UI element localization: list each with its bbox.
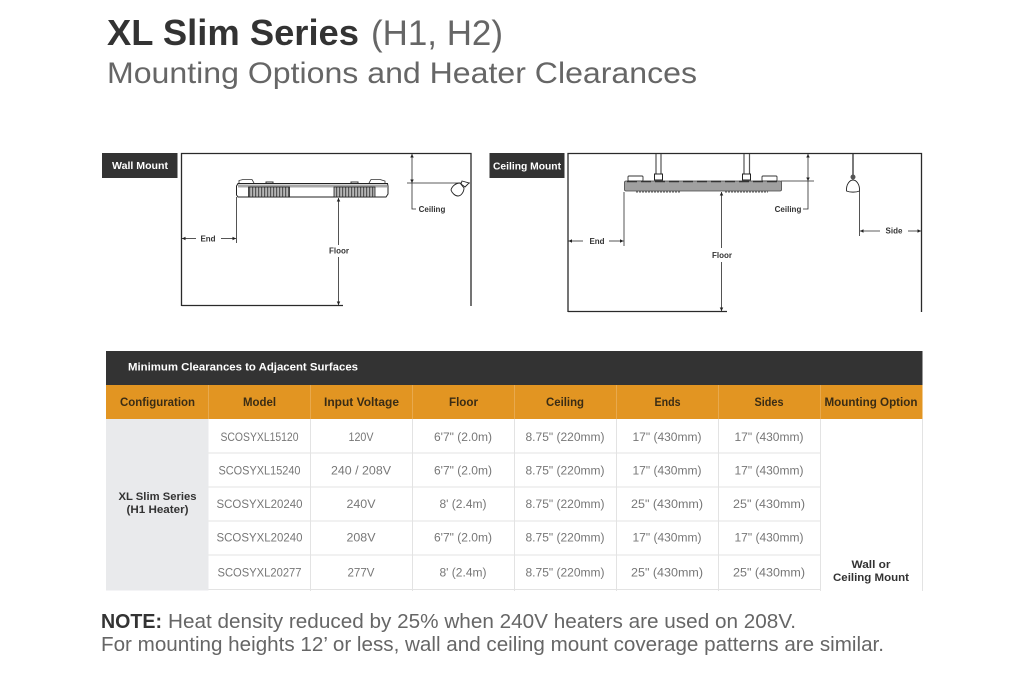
row: SCOSYXL15240: 17" (430mm): [734, 466, 804, 478]
table header row: Configuration: [120, 397, 195, 409]
mounting option cell: [833, 559, 909, 584]
dimension: end: End: [200, 234, 216, 244]
note: NOTE:: [101, 611, 162, 633]
diagram: wall mount: [182, 154, 471, 306]
table title bar: Minimum Clearances to Adjacent Surfaces: [128, 362, 358, 374]
dimension: ceiling: Ceiling: [775, 205, 801, 214]
table header row: Ceiling: [546, 397, 584, 409]
table header row: Ends: [654, 397, 680, 409]
row: SCOSYXL15240: 240 / 208V: [331, 466, 391, 478]
title: XL Slim Series: [107, 12, 359, 53]
icon: ceiling heater: [624, 154, 782, 192]
row: SCOSYXL20240 240V: [216, 499, 805, 511]
table header row: Input Voltage: [324, 397, 399, 409]
label: wall mount: [102, 153, 178, 178]
row: SCOSYXL20240 240V: SCOSYXL20240: [216, 499, 302, 511]
mounting option cell: Wall or: [852, 559, 891, 571]
row: SCOSYXL20240 208V: 17" (430mm): [734, 532, 804, 544]
mounting option cell: Ceiling Mount: [833, 572, 909, 584]
row: SCOSYXL20240 240V: 240V: [346, 499, 376, 511]
row: SCOSYXL20240 240V: 25" (430mm): [733, 499, 805, 511]
dimension: floor: [712, 192, 732, 311]
row: SCOSYXL20240 240V: 8' (2.4m): [440, 499, 487, 511]
row: SCOSYXL15120: SCOSYXL15120: [220, 432, 298, 444]
row: SCOSYXL20240 208V: [216, 532, 804, 544]
row: SCOSYXL20277: 25" (430mm): [631, 568, 703, 580]
row: SCOSYXL20240 240V: 25" (430mm): [631, 499, 703, 511]
row: SCOSYXL20240 208V: 6'7" (2.0m): [434, 532, 492, 544]
row: SCOSYXL15240: SCOSYXL15240: [218, 466, 300, 478]
dimension: ceiling: [775, 154, 814, 214]
row: SCOSYXL15120: 17" (430mm): [632, 432, 702, 444]
note: [101, 611, 884, 656]
dimension: end: End: [589, 237, 605, 246]
row: SCOSYXL15120: 6'7" (2.0m): [434, 432, 492, 444]
label: ceiling mount: Ceiling Mount: [493, 162, 562, 172]
configuration cell: [106, 419, 208, 590]
row: SCOSYXL15120: 120V: [348, 432, 374, 444]
dimension: end: [568, 192, 624, 246]
row: SCOSYXL15120: 17" (430mm): [734, 432, 804, 444]
row: SCOSYXL20277: 8.75" (220mm): [526, 568, 605, 580]
row: SCOSYXL15240: 8.75" (220mm): [526, 466, 605, 478]
row: SCOSYXL20277: SCOSYXL20277: [218, 568, 302, 580]
dimension: floor: [329, 198, 349, 305]
row: SCOSYXL20277: 25" (430mm): [733, 568, 805, 580]
title: (H1, H2): [371, 14, 503, 53]
row: SCOSYXL15240: [218, 466, 804, 478]
label: ceiling mount: [490, 153, 564, 178]
dimension: end: [182, 197, 236, 244]
table: [106, 351, 922, 591]
icon: hanging light: [846, 154, 860, 192]
dimension: floor: Floor: [712, 251, 732, 260]
table header row: Mounting Option: [824, 397, 918, 409]
row: SCOSYXL15240: 17" (430mm): [632, 466, 702, 478]
dimension: side: Side: [886, 226, 903, 236]
diagram: ceiling mount: [568, 154, 922, 312]
row: SCOSYXL20277: [218, 568, 805, 580]
table header row: Sides: [754, 397, 784, 409]
configuration cell: (H1 Heater): [126, 504, 189, 516]
table header row: Floor: [449, 397, 479, 409]
row: SCOSYXL20240 240V: 8.75" (220mm): [526, 499, 605, 511]
row: SCOSYXL20240 208V: 8.75" (220mm): [526, 532, 605, 544]
row: SCOSYXL15120: 8.75" (220mm): [526, 432, 605, 444]
dimension: floor: Floor: [329, 246, 349, 256]
table header row: Model: [243, 397, 276, 409]
dimension: ceiling: Ceiling: [419, 205, 445, 214]
dimension: side: [860, 191, 921, 236]
row: SCOSYXL20240 208V: 208V: [346, 532, 376, 544]
row: SCOSYXL20277: 8' (2.4m): [440, 568, 487, 580]
row: SCOSYXL20277: 277V: [348, 568, 375, 580]
table title bar: [106, 351, 922, 385]
configuration cell: XL Slim Series: [118, 491, 196, 503]
title: [107, 12, 503, 53]
row: SCOSYXL15120: [220, 432, 804, 444]
subtitle: Mounting Options and Heater Clearances: [107, 57, 697, 90]
label: wall mount: Wall Mount: [112, 161, 169, 172]
dimension: ceiling: [407, 154, 470, 214]
icon: wall heater: [236, 180, 388, 197]
table header row: [106, 385, 922, 419]
note: Heat density reduced by 25% when 240V heaters are used on 208V.: [168, 611, 796, 633]
note: For mounting heights 12’ or less, wall and ceiling mount coverage patterns are similar.: [101, 634, 884, 656]
table grid: [208, 419, 922, 591]
row: SCOSYXL20240 208V: 17" (430mm): [632, 532, 702, 544]
row: SCOSYXL15240: 6'7" (2.0m): [434, 466, 492, 478]
icon: wall light: [451, 181, 469, 196]
row: SCOSYXL20240 208V: SCOSYXL20240: [216, 532, 302, 544]
